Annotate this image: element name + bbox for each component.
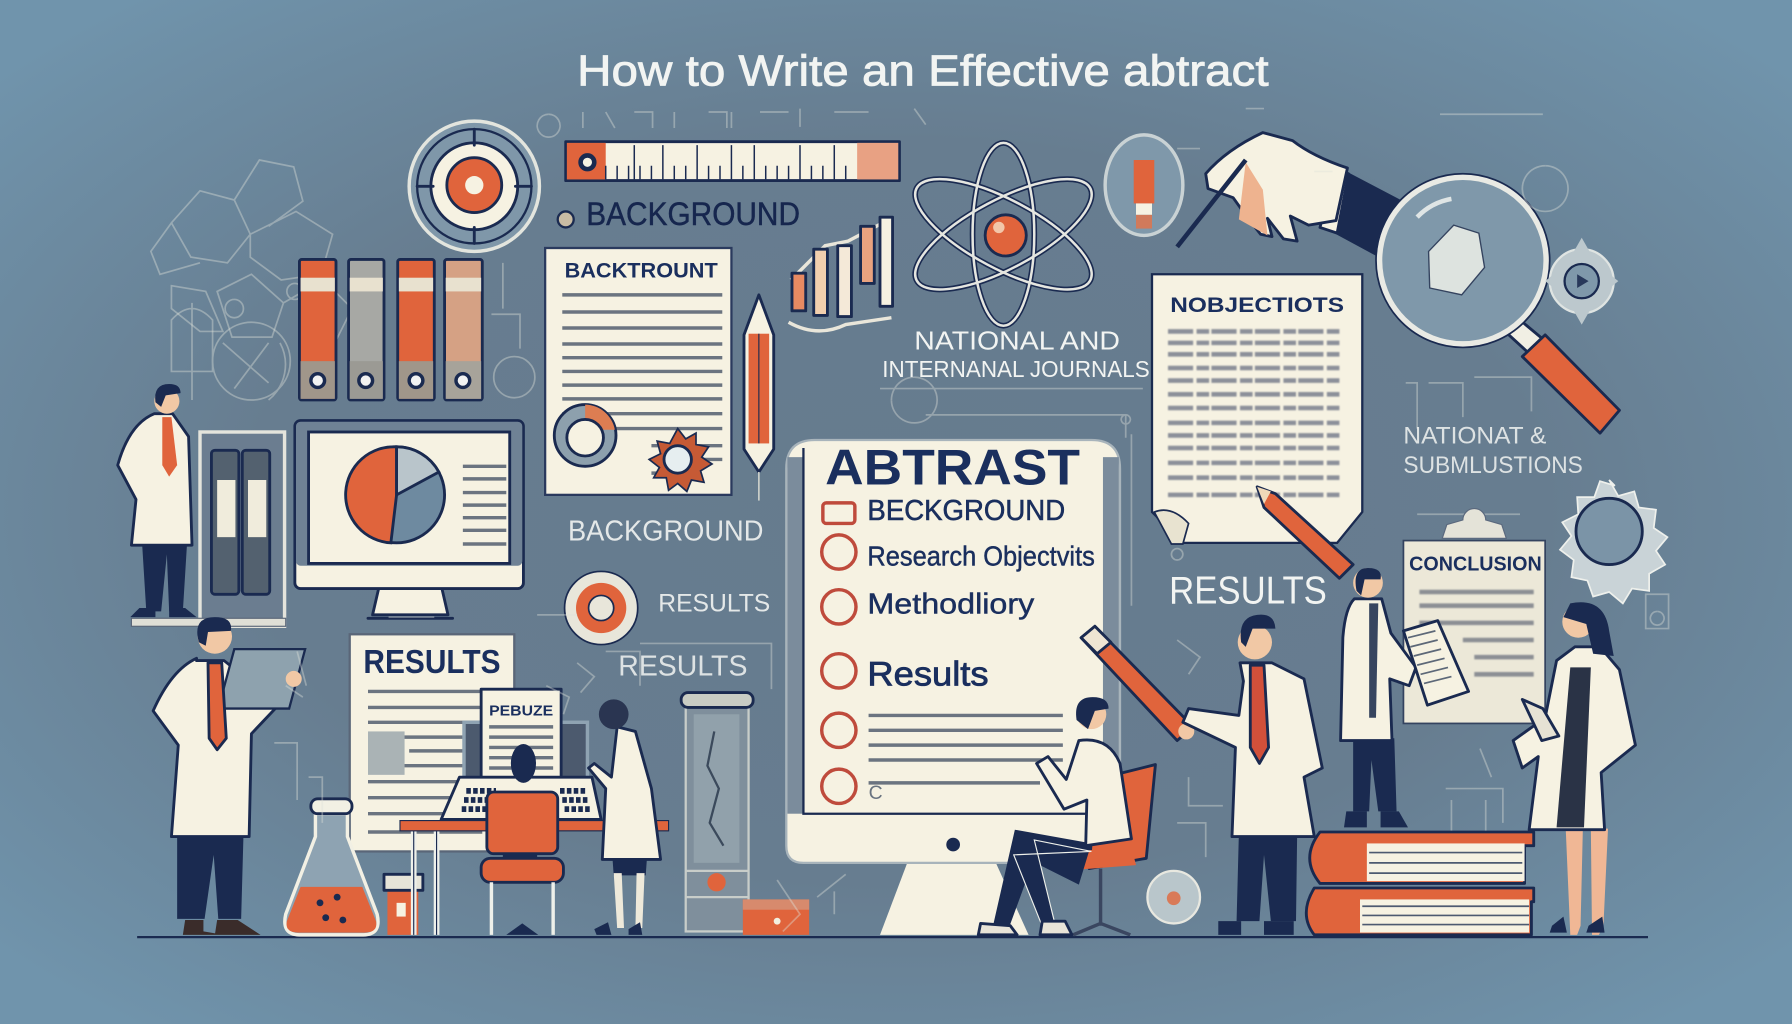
decorative scribbles xyxy=(274,549,1669,931)
text: national and international journals xyxy=(882,326,1150,382)
blurred text lines xyxy=(1168,331,1339,495)
icon: capsule badge xyxy=(1105,135,1183,235)
decorative scribble icons left xyxy=(171,109,926,400)
seated person xyxy=(489,744,558,821)
poster heading: RESULTS xyxy=(363,644,501,681)
icon: ruler xyxy=(566,142,899,181)
panel heading: ABTRAST xyxy=(825,439,1080,496)
desk top xyxy=(400,821,669,831)
scientist: woman at desk xyxy=(589,699,661,935)
document heading: BACKTROUNT xyxy=(565,258,718,283)
checklist markers xyxy=(822,503,856,803)
results poster xyxy=(350,634,514,851)
flask xyxy=(285,799,378,935)
poster lines xyxy=(368,691,505,832)
binder 2 xyxy=(349,259,384,400)
scientist: standing with pencil xyxy=(1183,615,1322,935)
paper on monitor: PEBUZE xyxy=(489,703,553,719)
clipboard heading: CONCLUSION xyxy=(1409,552,1542,575)
keyboard xyxy=(441,777,601,819)
chart legend lines xyxy=(463,466,506,544)
icon: burst xyxy=(649,429,712,491)
text: results lower: RESULTS xyxy=(618,650,747,682)
clipboard lines xyxy=(1419,592,1534,674)
pen on document xyxy=(1257,487,1353,578)
binders xyxy=(299,259,482,400)
large monitor: abstract panel: Research Objectvits xyxy=(867,541,1095,572)
text: national submissions: SUBMLUSTIONS xyxy=(1403,452,1583,479)
large monitor: abstract panel xyxy=(786,439,1120,935)
scientist: upper with document xyxy=(1341,568,1469,827)
checklist items: BECKGROUND xyxy=(867,495,1065,527)
scientist: with tablet xyxy=(153,617,305,935)
decorative molecular network xyxy=(151,160,352,343)
document heading: NOBJECTIOTS xyxy=(1170,292,1344,317)
document: nobjectiots xyxy=(1152,274,1362,544)
orange drawer xyxy=(743,899,809,935)
icon: gear top right xyxy=(1545,238,1618,325)
icon: atom xyxy=(901,143,1106,326)
computer monitor xyxy=(464,722,587,805)
small monitor with pie chart xyxy=(295,421,523,618)
binder 4 xyxy=(445,259,482,400)
heading: background: BACKGROUND xyxy=(586,196,800,232)
text: results: RESULTS xyxy=(658,589,770,617)
giant pencil xyxy=(1081,626,1194,741)
desk workstation xyxy=(400,689,669,935)
upper book xyxy=(1310,832,1534,883)
office chair xyxy=(1073,765,1155,935)
icon: target donut xyxy=(565,571,638,645)
scientist: seated xyxy=(978,697,1155,935)
magnifying glass xyxy=(1376,174,1619,433)
text: national and international journals: INTERNANAL JOURNALS xyxy=(882,356,1150,382)
cabinet with binders xyxy=(131,432,286,626)
text: national submissions xyxy=(1403,422,1583,479)
icon: disc xyxy=(1147,871,1200,923)
document: backtrount xyxy=(545,248,731,495)
text: results right: RESULTS xyxy=(1169,569,1327,612)
title: How to Write an Effective abtract xyxy=(577,48,1269,96)
icon: target xyxy=(409,121,539,251)
text: national and international journals: NATIONAL AND xyxy=(914,326,1120,356)
paper on monitor xyxy=(481,689,561,779)
orange chair xyxy=(481,792,563,935)
floor line xyxy=(137,936,1648,938)
jar xyxy=(384,874,423,935)
large monitor: abstract panel: Methodliory xyxy=(867,589,1035,621)
books stack xyxy=(1306,832,1534,935)
checklist blurred lines xyxy=(867,630,1039,634)
text: background: BACKGROUND xyxy=(568,516,763,548)
glass cabinet xyxy=(681,693,753,931)
text: national submissions: NATIONAT & xyxy=(1403,422,1546,449)
icon: ring xyxy=(554,405,616,466)
decorative connector xyxy=(880,109,1568,606)
hand holding pen xyxy=(1177,133,1421,258)
scientist: left small xyxy=(118,384,197,617)
icon: gear xyxy=(1560,480,1667,603)
large monitor: abstract panel: C xyxy=(869,782,883,804)
document lines xyxy=(562,295,722,473)
pie chart xyxy=(346,447,445,543)
icon: pencil xyxy=(744,295,774,501)
scientist: woman right xyxy=(1513,602,1635,935)
binder 3 xyxy=(398,259,434,400)
clipboard: conclusion xyxy=(1403,509,1545,723)
lower book xyxy=(1306,888,1534,935)
binder 1 xyxy=(299,259,336,400)
large monitor: abstract panel: Results xyxy=(867,656,989,694)
bar chart xyxy=(789,217,893,331)
